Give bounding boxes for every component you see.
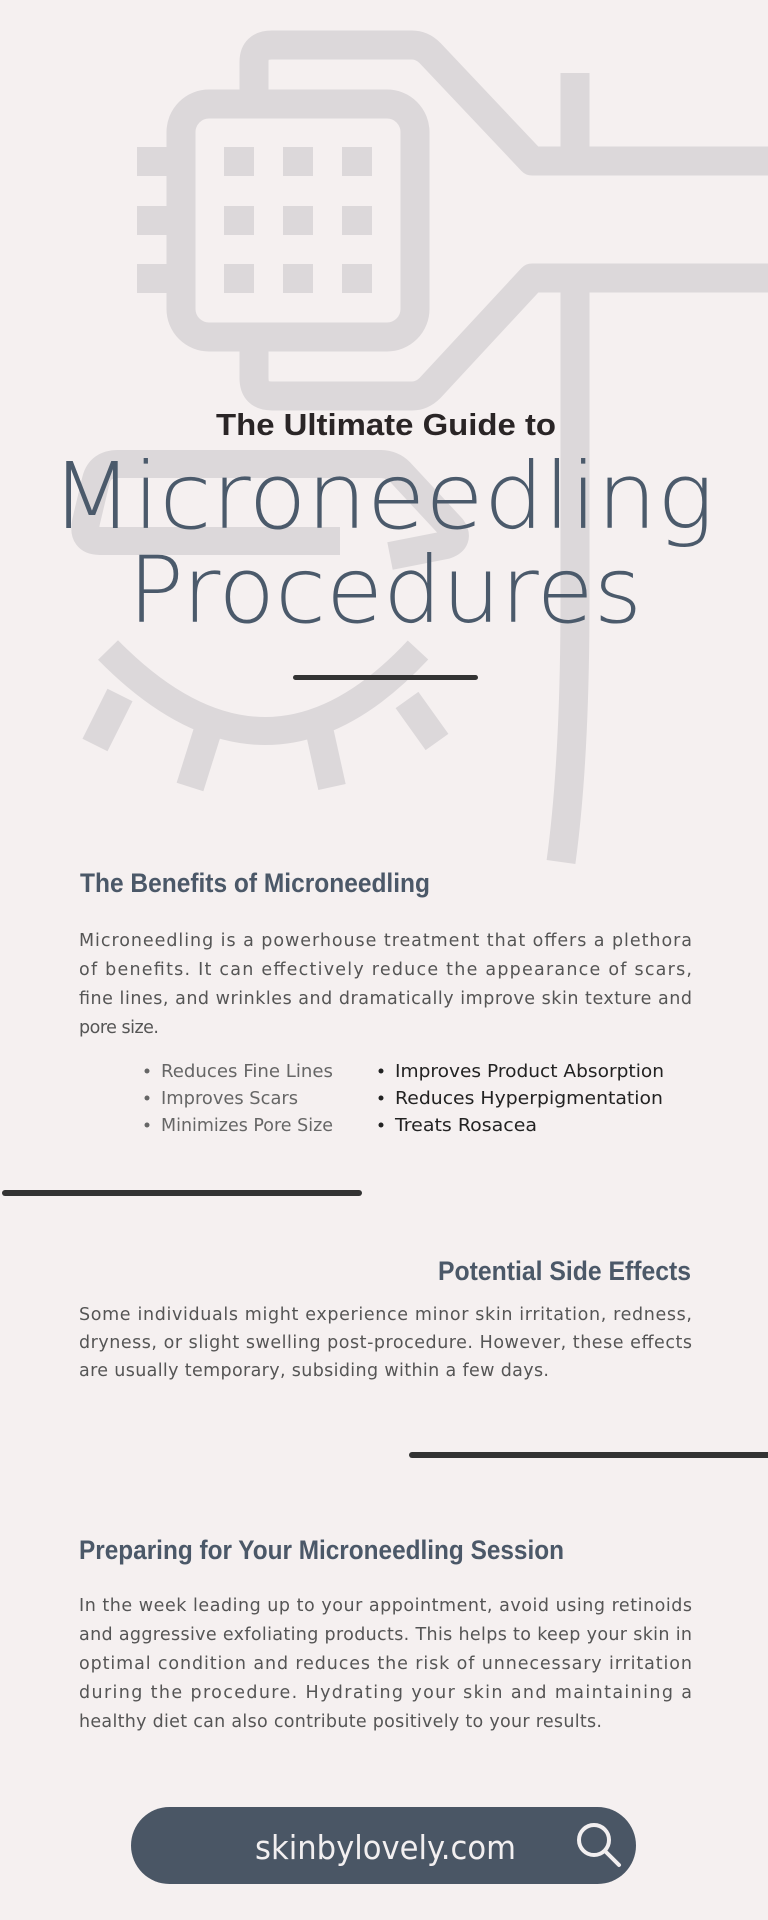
text block: benefits paragraph: Microneedling is a powerhouse treatment that offers a plethora (79, 931, 692, 951)
text block: benefits paragraph: pore size. (79, 1018, 159, 1038)
icon: microneedle roller background (137, 45, 768, 862)
footer: website pill: skinbylovely.com (255, 1828, 516, 1867)
title (51, 407, 714, 644)
text block: preparing paragraph: In the week leading up to your appointment, avoid using retinoids (79, 1596, 692, 1616)
text block: preparing paragraph (79, 1596, 692, 1732)
icon: closed eye background (85, 464, 455, 787)
text block: preparing paragraph: during the procedure. Hydrating your skin and maintaining a (79, 1683, 692, 1703)
text block: preparing paragraph: and aggressive exfoliating products. This helps to keep your skin in (79, 1625, 692, 1645)
text block: side effects paragraph: Some individuals might experience minor skin irritation, redness, (79, 1305, 692, 1325)
heading: preparing: Preparing for Your Microneedling Session (79, 1535, 564, 1565)
text block: side effects paragraph: are usually temporary, subsiding within a few days. (79, 1361, 549, 1381)
list: benefits bullets (144, 1062, 664, 1136)
list: benefits bullets: Improves Scars (161, 1089, 298, 1109)
heading: benefits: The Benefits of Microneedling (80, 868, 430, 898)
title: The Ultimate Guide to (216, 407, 556, 442)
list: benefits bullets: Improves Product Absorption (395, 1062, 664, 1082)
footer: website pill (131, 1807, 636, 1884)
text block: preparing paragraph: optimal condition and reduces the risk of unnecessary irritation (79, 1654, 692, 1674)
list: benefits bullets: Treats Rosacea (394, 1116, 537, 1136)
list: benefits bullets: Reduces Fine Lines (161, 1062, 333, 1082)
text block: preparing paragraph: healthy diet can also contribute positively to your results. (79, 1712, 602, 1732)
title: Microneedling (51, 443, 714, 550)
text block: side effects paragraph (79, 1305, 692, 1381)
text block: benefits paragraph (79, 931, 692, 1038)
heading: side effects: Potential Side Effects (438, 1256, 691, 1286)
list: benefits bullets: Reduces Hyperpigmentation (395, 1089, 663, 1109)
list: benefits bullets: Minimizes Pore Size (161, 1116, 333, 1136)
text block: benefits paragraph: fine lines, and wrinkles and dramatically improve skin texture and (79, 989, 692, 1009)
text block: benefits paragraph: of benefits. It can effectively reduce the appearance of scars, (79, 960, 692, 980)
text block: side effects paragraph: dryness, or slight swelling post-procedure. However, these effects (79, 1333, 692, 1353)
title: Procedures (128, 537, 642, 644)
icon: magnifier (579, 1825, 619, 1865)
